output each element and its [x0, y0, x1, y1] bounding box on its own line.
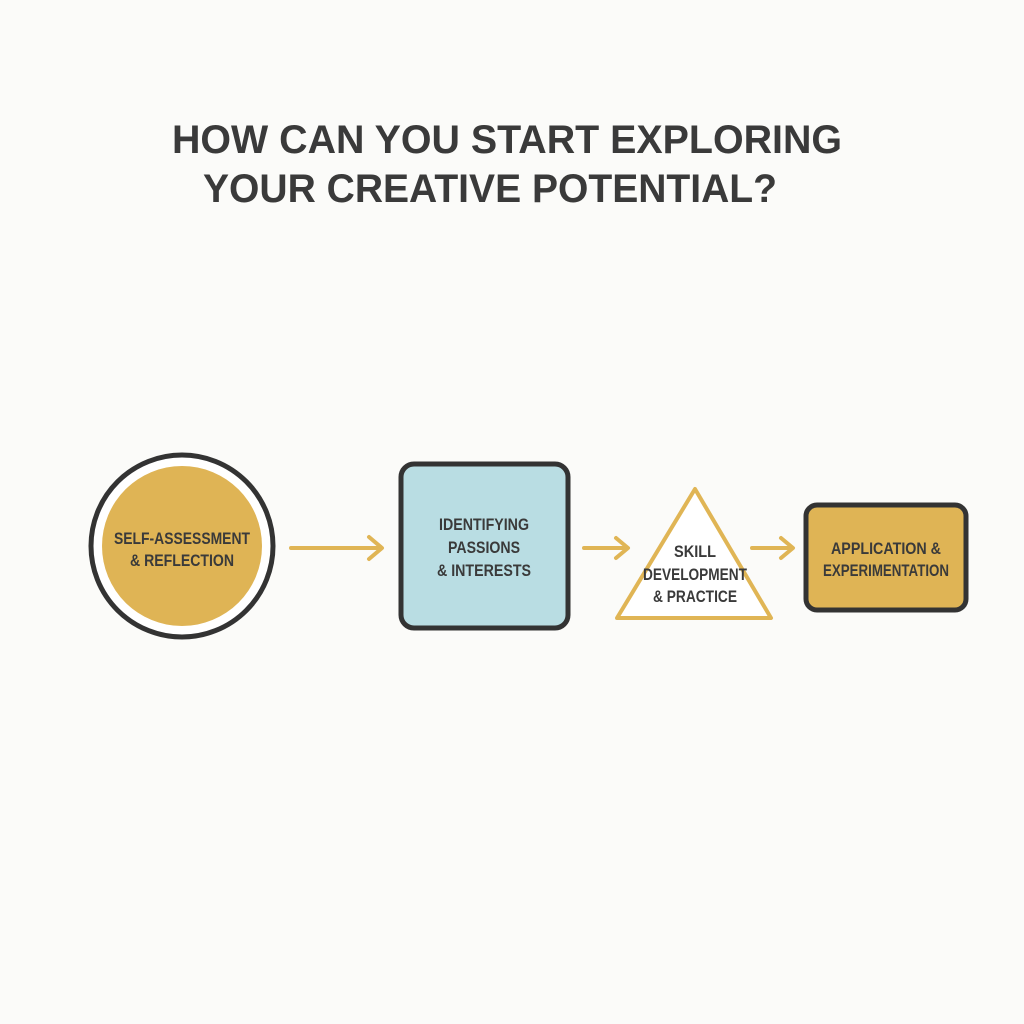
step 2: square: [401, 464, 568, 628]
step 2: square: PASSIONS: [448, 538, 520, 557]
title: [172, 118, 842, 211]
arrow 3: [752, 538, 793, 558]
step 4: rectangle: EXPERIMENTATION: [823, 561, 949, 580]
title: YOUR CREATIVE POTENTIAL?: [203, 167, 777, 211]
step 4: rectangle: APPLICATION &: [831, 539, 941, 558]
step 3: triangle: DEVELOPMENT: [643, 565, 747, 584]
step 1: circle: [91, 455, 273, 637]
step 3: triangle: & PRACTICE: [653, 587, 737, 606]
title: HOW CAN YOU START EXPLORING: [172, 118, 842, 162]
step 1: circle: & REFLECTION: [130, 551, 234, 570]
step 2: square: & INTERESTS: [437, 561, 531, 580]
step 4: rectangle: [806, 505, 966, 610]
step 1: circle: SELF-ASSESSMENT: [114, 529, 250, 548]
step 3: triangle: [617, 489, 771, 618]
arrow 2: [584, 538, 628, 558]
step 2: square: IDENTIFYING: [439, 515, 529, 534]
step 3: triangle: SKILL: [674, 542, 716, 561]
arrow 1: [291, 537, 382, 559]
